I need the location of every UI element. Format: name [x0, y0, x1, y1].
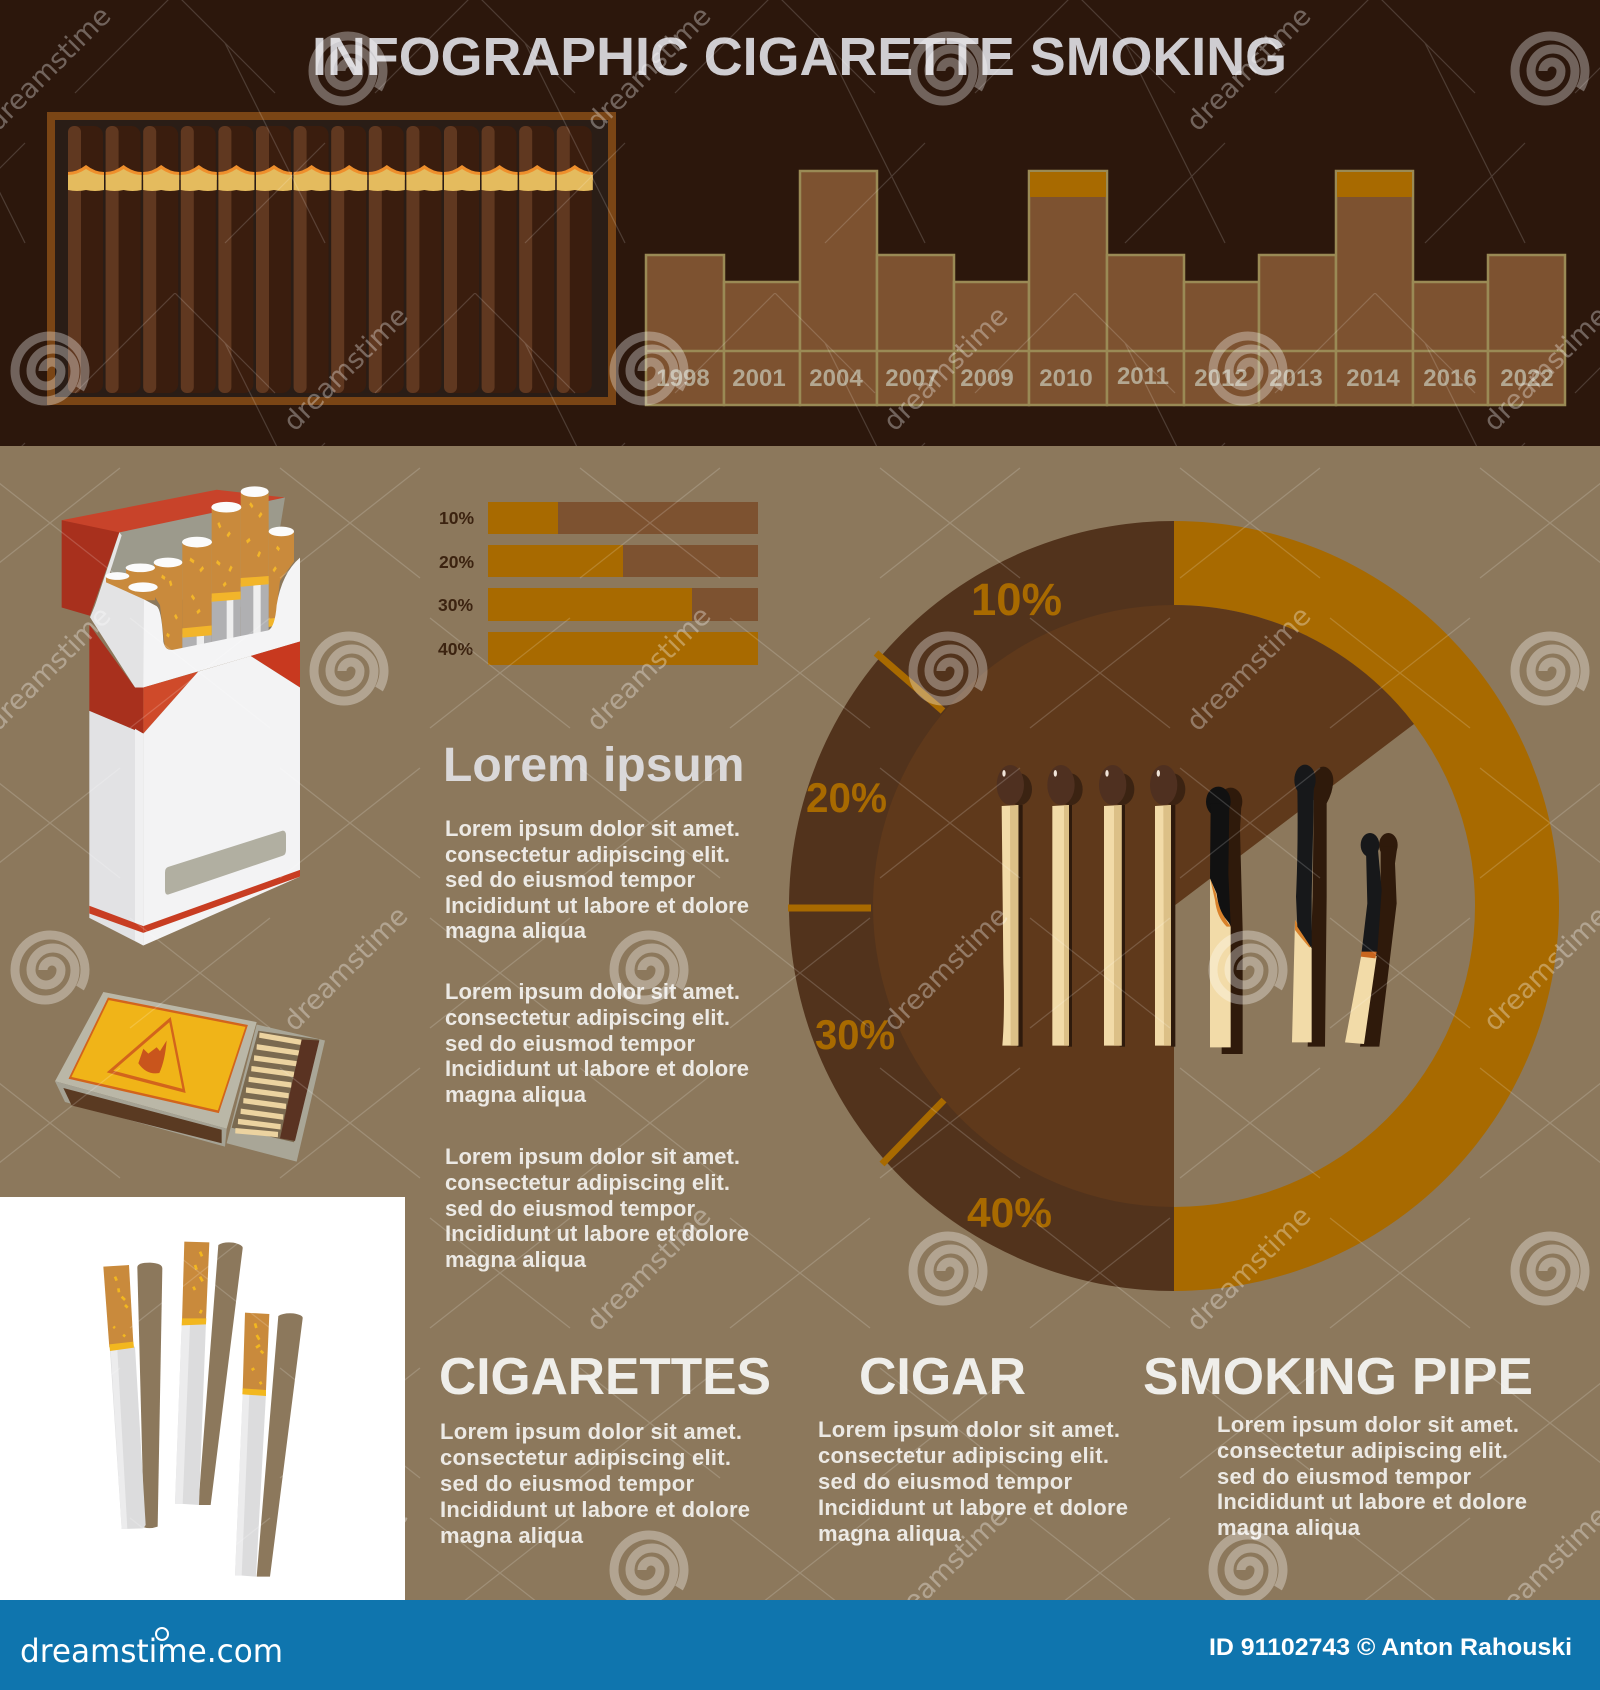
footer credit: ID 91102743 © Anton Rahouski [1209, 1634, 1572, 1661]
bar chart: years: 2010 [1039, 365, 1093, 392]
text block 1 [445, 816, 749, 943]
bar chart: years: 2016 [1423, 365, 1477, 392]
icon: unburnt match 3 [1099, 765, 1134, 1047]
heading: cigarettes: CIGARETTES [439, 1348, 771, 1406]
text block: cigar: sed do eiusmod tempor [818, 1469, 1072, 1494]
bar chart: years: 2012 [1194, 365, 1248, 392]
donut chart: 20% [806, 774, 887, 821]
watermark: diagonal text: dreamstime [581, 1201, 717, 1337]
bar chart: years [646, 171, 1565, 405]
text block 2: Lorem ipsum dolor sit amet. [445, 979, 740, 1004]
text block 1: sed do eiusmod tempor [445, 867, 695, 892]
top dark band [0, 0, 1600, 446]
icon: unburnt match 2 [1047, 765, 1083, 1047]
icon: matches burning progression [997, 765, 1398, 1054]
bar chart: years: 2022 [1500, 365, 1554, 392]
heading: smoking pipe: SMOKING PIPE [1143, 1348, 1533, 1406]
text block: smoking pipe: Lorem ipsum dolor sit amet. [1217, 1412, 1519, 1437]
watermark: diagonal text: dreamstime [581, 1, 717, 137]
icon: unburnt match 4 [1150, 765, 1185, 1047]
text block: cigarettes [440, 1419, 750, 1548]
text block: smoking pipe [1217, 1412, 1527, 1540]
text block 3: consectetur adipiscing elit. [445, 1170, 730, 1195]
text block 1: Incididunt ut labore et dolore [445, 893, 749, 918]
text block: cigarettes: Incididunt ut labore et dolore [440, 1497, 750, 1522]
text block 3 [445, 1144, 749, 1272]
text block 2: sed do eiusmod tempor [445, 1031, 695, 1056]
text block: cigarettes: Lorem ipsum dolor sit amet. [440, 1419, 742, 1444]
donut chart [788, 521, 1559, 1291]
text block: cigar: Lorem ipsum dolor sit amet. [818, 1417, 1120, 1442]
watermark: diagonal text: dreamstime [278, 1501, 414, 1637]
text block 3: magna aliqua [445, 1247, 587, 1272]
bar chart: years: 2011 [1117, 363, 1169, 390]
bar chart: years: 2001 [732, 365, 786, 392]
footer logo spiral [156, 1628, 168, 1640]
panel: white cigarettes panel [0, 1197, 405, 1600]
heading: cigar: CIGAR [859, 1348, 1026, 1406]
text block 3: Lorem ipsum dolor sit amet. [445, 1144, 740, 1169]
watermark: diagonal text: dreamstime [278, 301, 414, 437]
watermark: diagonal text: dreamstime [1181, 1, 1317, 137]
text block 3: sed do eiusmod tempor [445, 1196, 695, 1221]
watermark: diagonal text: dreamstime [581, 601, 717, 737]
donut chart: 40% [967, 1189, 1052, 1236]
donut chart: 30% [815, 1011, 895, 1058]
bar chart: years: 2004 [809, 365, 863, 392]
bar chart: years: 1998 [656, 365, 710, 392]
icon: burnt match 3 [1345, 833, 1398, 1047]
bar chart: years: 2009 [960, 365, 1014, 392]
bar chart: percentages: 40% [438, 639, 473, 659]
bar chart: percentages: 30% [438, 595, 473, 615]
title: INFOGRAPHIC CIGARETTE SMOKING [312, 27, 1287, 87]
text block 2: consectetur adipiscing elit. [445, 1005, 730, 1030]
text block: cigar: magna aliqua [818, 1521, 962, 1546]
text block 2 [445, 979, 749, 1107]
icon: open cigarette pack [62, 486, 300, 945]
text block 2: magna aliqua [445, 1082, 587, 1107]
bar chart: years: 2014 [1346, 365, 1400, 392]
bar chart: years: 2007 [885, 365, 939, 392]
watermark: diagonal text: dreamstime [878, 301, 1014, 437]
text block 3: Incididunt ut labore et dolore [445, 1221, 749, 1246]
icon: burnt match 2 [1292, 765, 1333, 1047]
donut chart: 10% [971, 574, 1062, 625]
watermark: diagonal text: dreamstime [1181, 601, 1317, 737]
bar chart: percentages [438, 502, 758, 665]
icon: burnt match 1 [1206, 787, 1243, 1054]
icon: matchbox [55, 992, 325, 1162]
text block: cigar [818, 1417, 1128, 1546]
text block: smoking pipe: consectetur adipiscing elit. [1217, 1438, 1508, 1463]
watermark: diagonal text: dreamstime [1181, 1201, 1317, 1337]
text block 1: magna aliqua [445, 918, 587, 943]
text block 1: consectetur adipiscing elit. [445, 842, 730, 867]
footer logo text: dreamstime.com [20, 1632, 283, 1670]
text block: smoking pipe: sed do eiusmod tempor [1217, 1464, 1471, 1489]
text block: cigarettes: sed do eiusmod tempor [440, 1471, 694, 1496]
text block: cigarettes: magna aliqua [440, 1523, 584, 1548]
icon: unburnt match 1 [997, 765, 1032, 1047]
watermark: diagonal text: dreamstime [878, 1501, 1014, 1637]
footer band [0, 1600, 1600, 1690]
text block 2: Incididunt ut labore et dolore [445, 1056, 749, 1081]
cigar box [51, 116, 612, 401]
heading: Lorem ipsum: Lorem ipsum [443, 739, 744, 792]
watermark: diagonal text: dreamstime [278, 901, 414, 1037]
watermark: diagonal text: dreamstime [878, 901, 1014, 1037]
text block 1: Lorem ipsum dolor sit amet. [445, 816, 740, 841]
text block: smoking pipe: Incididunt ut labore et dolore [1217, 1489, 1527, 1514]
text block: cigar: consectetur adipiscing elit. [818, 1443, 1109, 1468]
bar chart: percentages: 20% [439, 552, 474, 572]
text block: cigarettes: consectetur adipiscing elit. [440, 1445, 731, 1470]
text block: smoking pipe: magna aliqua [1217, 1515, 1361, 1540]
bar chart: years: 2013 [1269, 365, 1323, 392]
text block: cigar: Incididunt ut labore et dolore [818, 1495, 1128, 1520]
icon: three cigarettes with shadows [103, 1242, 303, 1577]
bar chart: percentages: 10% [439, 508, 474, 528]
